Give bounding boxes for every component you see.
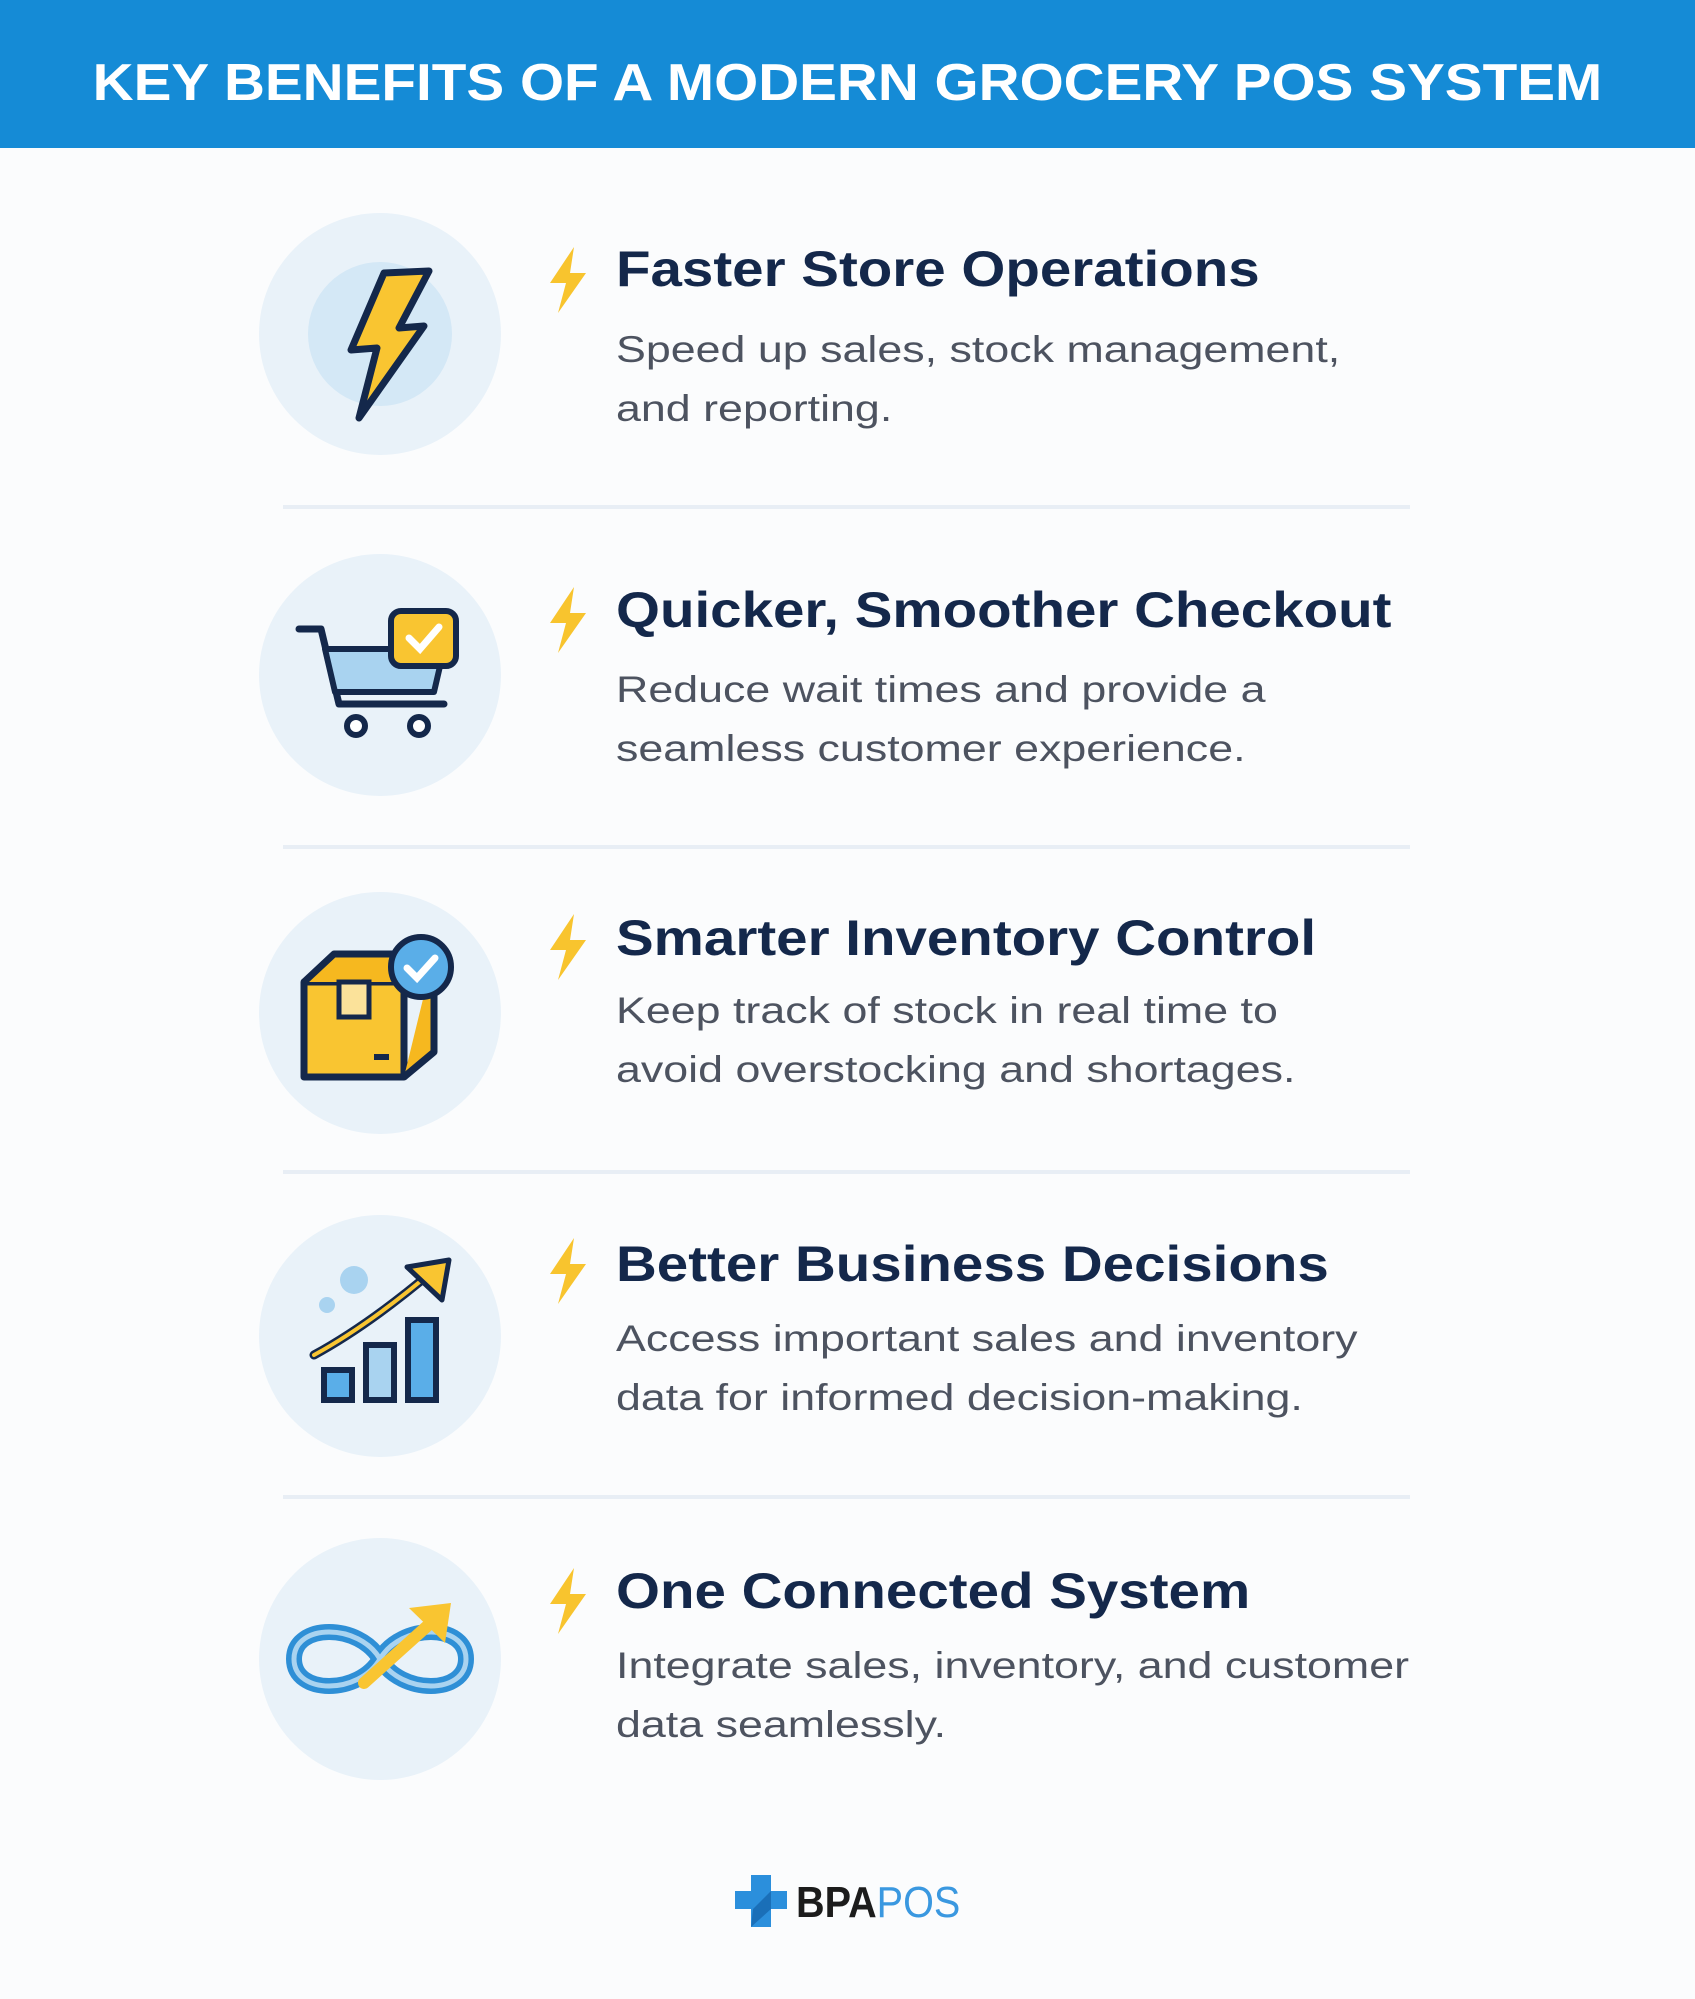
text bbox=[616, 990, 1295, 1090]
text: data seamlessly. bbox=[616, 1704, 946, 1745]
bolt bbox=[550, 587, 586, 653]
title bbox=[0, 0, 1695, 148]
text bbox=[616, 669, 1266, 769]
icon: box bbox=[259, 892, 501, 1134]
bolt bbox=[550, 247, 586, 313]
text: Speed up sales, stock management, bbox=[616, 329, 1340, 370]
icon: lightning bbox=[259, 213, 501, 455]
heading: Smarter Inventory Control bbox=[616, 910, 1316, 966]
text: Integrate sales, inventory, and customer bbox=[616, 1645, 1409, 1686]
text: and reporting. bbox=[616, 388, 892, 429]
heading: One Connected System bbox=[616, 1563, 1250, 1619]
text: seamless customer experience. bbox=[616, 728, 1246, 769]
row 4 bbox=[259, 1215, 1358, 1457]
title: KEY BENEFITS OF A MODERN GROCERY POS SYSTEM bbox=[93, 54, 1602, 112]
text: avoid overstocking and shortages. bbox=[616, 1049, 1295, 1090]
icon: chart bbox=[259, 1215, 501, 1457]
heading: Quicker, Smoother Checkout bbox=[616, 582, 1391, 638]
logo bbox=[735, 1875, 960, 1927]
row 2 bbox=[259, 554, 1391, 796]
heading: Faster Store Operations bbox=[616, 241, 1260, 297]
text: Reduce wait times and provide a bbox=[616, 669, 1266, 710]
bolt bbox=[550, 1238, 586, 1304]
text bbox=[616, 1318, 1358, 1418]
row 1 bbox=[259, 213, 1340, 455]
text bbox=[616, 1645, 1409, 1745]
heading: Better Business Decisions bbox=[616, 1236, 1329, 1292]
icon: cross bbox=[735, 1875, 787, 1927]
wordmark: BPAPOS bbox=[796, 1878, 960, 1927]
row 5 bbox=[259, 1538, 1409, 1780]
icon: cart bbox=[259, 554, 501, 796]
text: Access important sales and inventory bbox=[616, 1318, 1358, 1359]
text: data for informed decision-making. bbox=[616, 1377, 1303, 1418]
icon: infinity bbox=[259, 1538, 501, 1780]
bolt bbox=[550, 1568, 586, 1634]
row 3 bbox=[259, 892, 1316, 1134]
text bbox=[616, 329, 1340, 429]
bolt bbox=[550, 914, 586, 980]
text: Keep track of stock in real time to bbox=[616, 990, 1278, 1031]
